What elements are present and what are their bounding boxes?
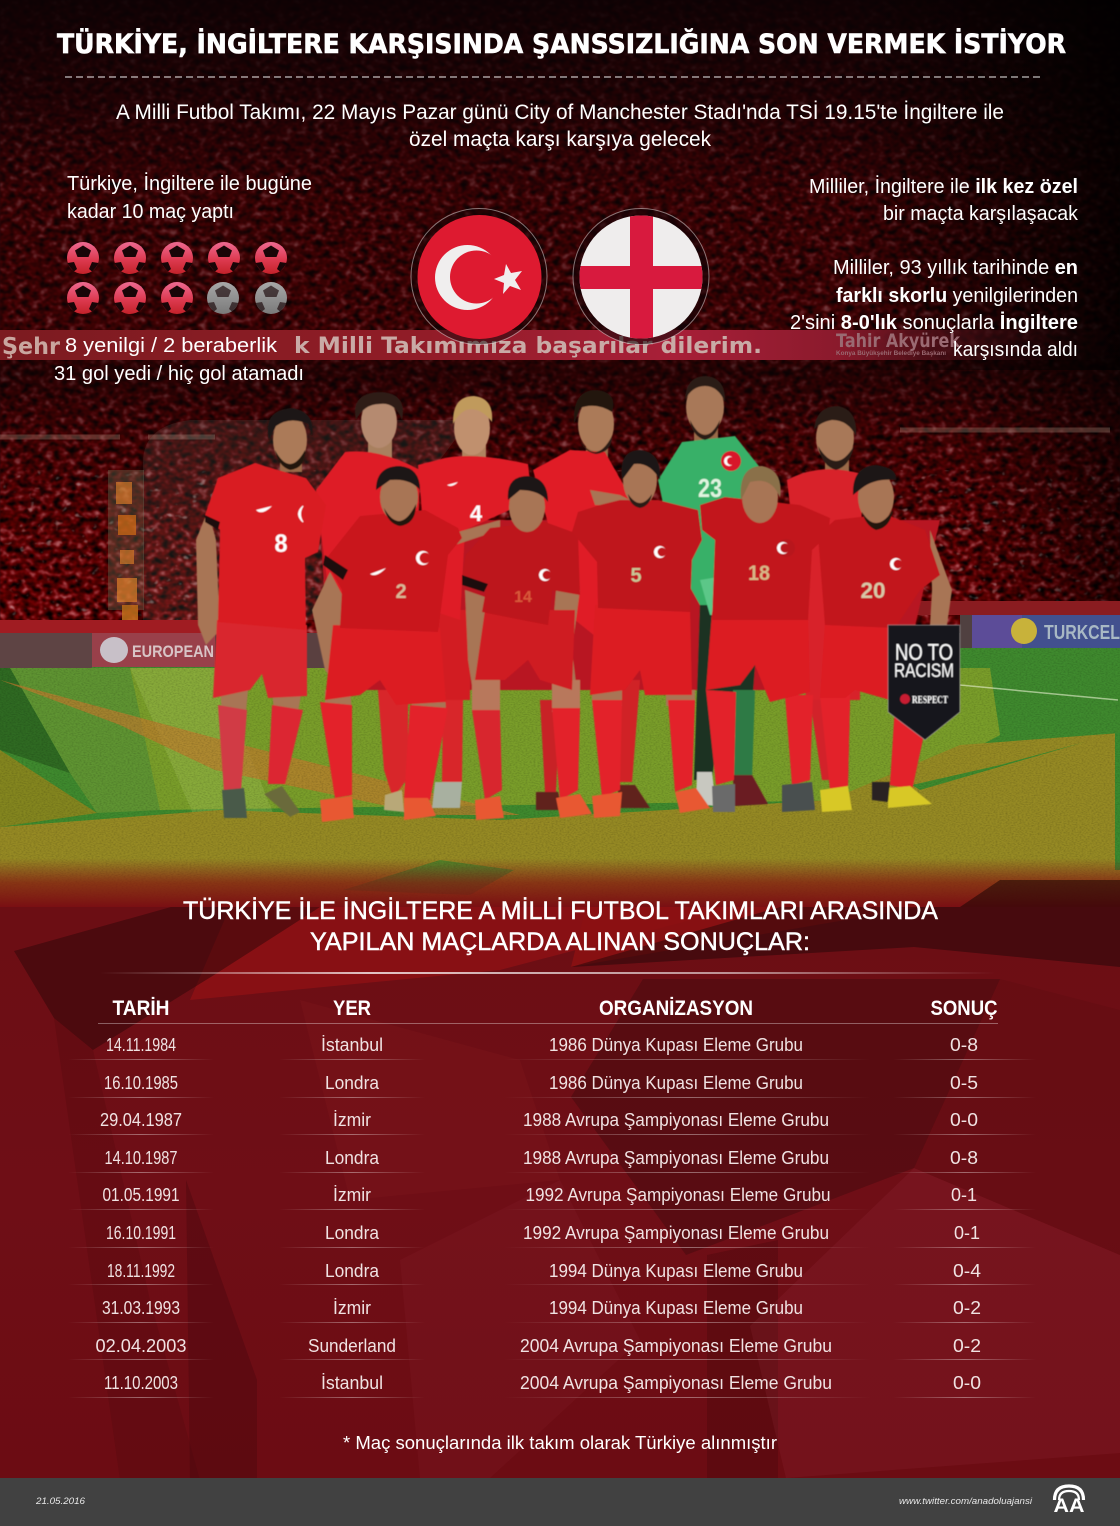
red stadium banner: Şehr (2, 334, 61, 360)
left green pitch area (10, 668, 160, 813)
table row 1: 14.11.1984 (106, 1034, 176, 1055)
table row 6: Londra (325, 1222, 380, 1243)
table row 3: İzmir (333, 1109, 371, 1130)
advertising boards (0, 601, 1120, 668)
table row 5 (102, 1184, 977, 1205)
dark shard centre right (571, 979, 1000, 1255)
title: TÜRKİYE, İNGİLTERE KARŞISINDA ŞANSSIZLIĞINA SON VERMEK İSTİYOR (57, 27, 1066, 60)
intro text: A Milli Futbol Takımı, 22 Mayıs Pazar günü City of Manchester Stadı'nda TSİ 19.15'te İngiltere ile (116, 101, 1004, 124)
back row player: number 4: 4 (470, 501, 483, 526)
table row 6 (106, 1222, 980, 1243)
icon: football draw 1 (207, 282, 239, 314)
pennant: no to racism: RESPECT (912, 695, 948, 706)
table row 7: 0-4 (953, 1260, 981, 1281)
front player: number 14: 14 (514, 589, 532, 606)
table header: ORGANİZASYON (599, 997, 753, 1020)
icon: Turkish flag (411, 208, 547, 344)
table row 10: 11.10.2003 (104, 1372, 178, 1393)
orange band (0, 680, 520, 815)
yellow lower pitch (0, 750, 97, 827)
table row 1: 0-8 (950, 1034, 978, 1055)
icon: football loss 3 (161, 242, 193, 274)
front player: number 20: 20 (860, 578, 886, 603)
intro text (116, 101, 1004, 151)
table row 1: İstanbul (321, 1034, 383, 1055)
icon: football loss 5 (255, 242, 287, 274)
table row 2: 0-5 (950, 1072, 978, 1093)
lighter central pitch (10, 668, 1000, 810)
right stat text: first friendly: Milliler, İngiltere ile ilk kez özel (809, 175, 1078, 198)
pale shard lower right (750, 1168, 1120, 1478)
stand rails (0, 430, 1110, 437)
left stat text: matches played: Türkiye, İngiltere ile bugüne (67, 172, 312, 195)
front player: number 5 (572, 450, 710, 818)
red stadium banner: Tahir Akyürek (836, 330, 960, 352)
red stadium banner: Konya Büyükşehir Belediye Başkanı (836, 351, 946, 357)
table header: SONUÇ (930, 997, 998, 1020)
back row player: green goalkeeper: 23 (698, 473, 722, 503)
table row 3 (100, 1109, 978, 1130)
left stat text: results: 8 yenilgi / 2 beraberlik (65, 335, 278, 357)
pennant: no to racism (888, 625, 960, 740)
table row 3: 0-0 (950, 1109, 978, 1130)
footnote: * Maç sonuçlarında ilk takım olarak Türkiye alınmıştır (343, 1432, 777, 1453)
advertising boards: EUROPEAN (132, 642, 214, 661)
translucent rounded overlay (143, 420, 470, 620)
table row 2: 1986 Dünya Kupası Eleme Grubu (549, 1072, 803, 1093)
results heading: YAPILAN MAÇLARDA ALINAN SONUÇLAR: (310, 928, 810, 956)
table header (112, 997, 998, 1020)
icon: football loss 7 (114, 282, 146, 314)
right stat text: biggest defeats: Milliler, 93 yıllık tarihinde en (833, 257, 1078, 279)
back row player: number 4 (418, 396, 532, 808)
table row 10: 0-0 (953, 1372, 981, 1393)
team photo illustration (196, 376, 960, 822)
table row 4: Londra (325, 1147, 380, 1168)
dark shard top right (571, 907, 1120, 967)
front player: number 2 (312, 466, 500, 822)
front player: number 5: 5 (630, 565, 642, 587)
table row 5: 01.05.1991 (102, 1184, 180, 1205)
stadium crowd background (0, 0, 1120, 670)
icon: Anadolu Agency logo (1054, 1486, 1085, 1517)
icon: football loss 2 (114, 242, 146, 274)
left stat text: results: 31 gol yedi / hiç gol atamadı (54, 363, 304, 385)
green diamond at bottom of pitch (343, 860, 514, 895)
table row 8: 31.03.1993 (102, 1297, 180, 1318)
icon: football loss 1 (67, 242, 99, 274)
front player: number 20 (818, 465, 952, 812)
left stat text: matches played (67, 172, 312, 223)
table row 8: İzmir (333, 1297, 371, 1318)
table header: TARİH (112, 997, 170, 1020)
front player: number 2: 2 (395, 581, 407, 603)
table header: YER (333, 997, 371, 1020)
table row 8: 0-2 (953, 1297, 981, 1318)
icon: football loss 8 (161, 282, 193, 314)
table row 2 (104, 1072, 978, 1093)
table row 4: 0-8 (950, 1147, 978, 1168)
red stadium banner: k Milli Takımımıza başarılar dilerim. (294, 334, 762, 359)
table row 2: 16.10.1985 (104, 1072, 178, 1093)
intro text: özel maçta karşı karşıya gelecek (409, 128, 711, 151)
table row 1: 1986 Dünya Kupası Eleme Grubu (549, 1034, 803, 1055)
pale shard centre (400, 1180, 640, 1478)
front player: number 8 (196, 408, 326, 818)
table row 7 (107, 1260, 981, 1281)
right stat text: biggest defeats: farklı skorlu yenilgilerinden (836, 285, 1078, 307)
table row 4: 1988 Avrupa Şampiyonası Eleme Grubu (523, 1147, 829, 1168)
front player: number 18 (700, 466, 830, 812)
table row 2: Londra (325, 1072, 380, 1093)
table row 8: 1994 Dünya Kupası Eleme Grubu (549, 1297, 803, 1318)
table row 3: 29.04.1987 (100, 1109, 182, 1130)
dark shard left column (54, 1018, 200, 1480)
right stat text: biggest defeats: karşısında aldı (953, 339, 1078, 361)
right stat text: first friendly: bir maçta karşılaşacak (883, 203, 1079, 225)
back row player: right (787, 406, 862, 780)
left stat text: results (54, 335, 304, 385)
front player: number 14 (462, 476, 592, 820)
table row 4: 14.10.1987 (104, 1147, 178, 1168)
results heading (183, 896, 938, 956)
table row 10 (104, 1372, 981, 1393)
icon: English flag (573, 208, 710, 345)
right stat text: biggest defeats: 2'sini 8-0'lık sonuçlarla İngiltere (790, 311, 1078, 334)
table row 10: İstanbul (321, 1372, 383, 1393)
table row 9: 0-2 (953, 1335, 981, 1356)
icon: football loss 6 (67, 282, 99, 314)
pennant: no to racism: RACISM (894, 661, 954, 682)
table row 7: 1994 Dünya Kupası Eleme Grubu (549, 1260, 803, 1281)
table row 9: 2004 Avrupa Şampiyonası Eleme Grubu (520, 1335, 832, 1356)
table row 5: 0-1 (951, 1184, 977, 1205)
stairway with stewards (108, 470, 144, 629)
table row 1 (106, 1034, 978, 1055)
front player: number 18: 18 (748, 562, 770, 585)
table row 5: 1992 Avrupa Şampiyonası Eleme Grubu (526, 1184, 830, 1205)
dark green corner (0, 668, 70, 773)
right stat text: biggest defeats (790, 257, 1078, 361)
table row 9: 02.04.2003 (96, 1335, 186, 1356)
dashed title divider (65, 76, 1042, 78)
icon: football draw 2 (255, 282, 287, 314)
table row 7: Londra (325, 1260, 380, 1281)
lower red background with geometric shards (0, 907, 1120, 1480)
table row 5: İzmir (333, 1184, 371, 1205)
table row 4 (104, 1147, 978, 1168)
footer date: 21.05.2016 (35, 1496, 85, 1506)
red mass behind players (320, 520, 940, 690)
table row 3: 1988 Avrupa Şampiyonası Eleme Grubu (523, 1109, 829, 1130)
left stat text: matches played: kadar 10 maç yaptı (67, 201, 234, 223)
results table (68, 997, 1036, 1398)
football pitch (0, 648, 1120, 907)
results heading: TÜRKİYE İLE İNGİLTERE A MİLLİ FUTBOL TAKIMLARI ARASINDA (183, 896, 938, 925)
table row 9 (96, 1335, 981, 1356)
footer twitter link: www.twitter.com/anadoluajansi (899, 1496, 1033, 1506)
table row 10: 2004 Avrupa Şampiyonası Eleme Grubu (520, 1372, 832, 1393)
right stat text: first friendly (809, 175, 1079, 225)
football icons: 8 losses and 2 draws (67, 242, 287, 314)
table row 6: 16.10.1991 (106, 1222, 176, 1243)
bright red band (190, 907, 740, 1000)
back row player: fourth (533, 390, 650, 810)
table row 7: 18.11.1992 (107, 1260, 175, 1281)
icon: Anadolu Agency logo: AA (1054, 1496, 1085, 1517)
table row 6: 1992 Avrupa Şampiyonası Eleme Grubu (523, 1222, 829, 1243)
table row 6: 0-1 (954, 1222, 980, 1243)
icon: football loss 4 (208, 242, 240, 274)
back row player: second from left (316, 392, 420, 812)
footer bar (0, 1478, 1120, 1526)
red stadium banner (0, 330, 1120, 360)
table row 9: Sunderland (308, 1335, 396, 1356)
table row 8 (102, 1297, 981, 1318)
front player: number 8: 8 (274, 530, 288, 558)
dark shard upper left (14, 907, 320, 1050)
back row player: green goalkeeper (658, 376, 768, 806)
pennant: no to racism: NO TO (895, 639, 953, 665)
heading divider (100, 972, 995, 974)
